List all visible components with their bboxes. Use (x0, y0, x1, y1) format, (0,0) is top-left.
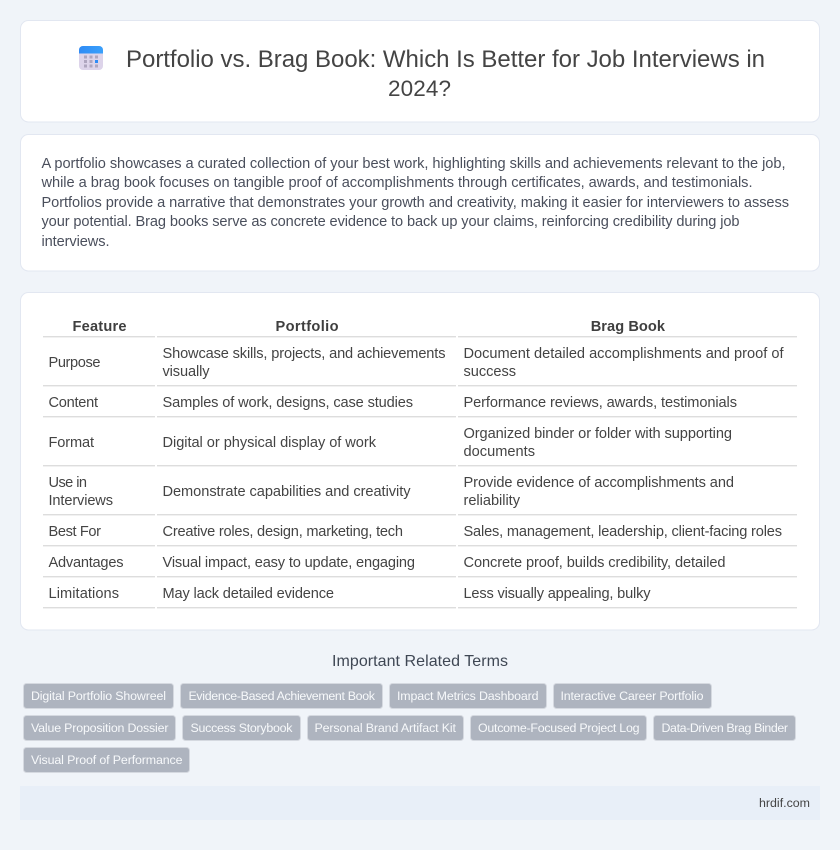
tag: Outcome-Focused Project Log (470, 716, 646, 740)
table row: Purpose: Showcase skills, projects, and achievements (162, 346, 446, 362)
heading: related terms: Important Related Terms (332, 653, 508, 670)
tag: Impact Metrics Dashboard: Impact Metrics Dashboard (397, 689, 539, 703)
table row: Best For (43, 524, 797, 546)
footer source label: hrdif.com (759, 796, 810, 810)
panel: summary (20, 134, 820, 271)
table row: Limitations: Limitations (48, 586, 119, 602)
tag: Outcome-Focused Project Log: Outcome-Focused Project Log (478, 721, 640, 735)
tag: Evidence-Based Achievement Book (180, 684, 382, 708)
table row: Content: Content (48, 395, 98, 411)
table row: Advantages: Advantages (48, 555, 124, 571)
table header row (43, 319, 797, 337)
title: Portfolio vs. Brag Book: Which Is Better for Job Interviews in (126, 46, 765, 73)
tag: Personal Brand Artifact Kit: Personal Brand Artifact Kit (314, 721, 457, 735)
table row: Format (43, 426, 797, 466)
summary text block (40, 156, 789, 250)
table row: Content (43, 395, 797, 417)
table row: Format: Format (48, 435, 94, 451)
table row: Advantages: Concrete proof, builds credibility, detailed (464, 555, 726, 571)
table row: Purpose: Document detailed accomplishments and proof of (464, 346, 784, 362)
table row: Format: Organized binder or folder with supporting (464, 426, 732, 442)
tag: Value Proposition Dossier (24, 716, 176, 740)
title: 2024? (388, 76, 451, 101)
icon: calendar (79, 46, 103, 70)
tag: Success Storybook (182, 716, 300, 740)
table row: Use in Interviews: Demonstrate capabilities and creativity (162, 484, 411, 500)
tag: Digital Portfolio Showreel (24, 684, 174, 708)
summary text block: A portfolio showcases a curated collection of your best work, highlighting skills and achievements relevant to the job, (42, 156, 786, 172)
summary text block: your potential. Brag books serve as concrete evidence to back up your claims, reinforcing credibility during job (42, 214, 740, 230)
tag: Digital Portfolio Showreel: Digital Portfolio Showreel (31, 689, 166, 703)
summary text block: while a brag book focuses on tangible proof of accomplishments through certificates, awards, and testimonials. (40, 175, 752, 191)
tag: Evidence-Based Achievement Book: Evidence-Based Achievement Book (188, 689, 376, 703)
table row: Purpose: visually (162, 364, 210, 380)
table row: Use in Interviews: Use in (48, 475, 87, 491)
table row: Use in Interviews: Interviews (48, 493, 113, 509)
panel: comparison table (20, 292, 820, 630)
table header row: Brag Book (591, 319, 666, 335)
table row: Best For: Sales, management, leadership, client-facing roles (464, 524, 782, 540)
tag: Data-Driven Brag Binder: Data-Driven Brag Binder (662, 721, 788, 735)
tag: Success Storybook: Success Storybook (190, 721, 293, 735)
table row: Best For: Best For (48, 524, 101, 540)
panel: title header (20, 20, 820, 122)
table row: Advantages (43, 555, 797, 577)
table row: Content: Samples of work, designs, case studies (162, 395, 413, 411)
table row: Format: Digital or physical display of work (162, 435, 377, 451)
table row: Content: Performance reviews, awards, testimonials (464, 395, 737, 411)
table row: Use in Interviews: reliability (464, 493, 521, 509)
table row: Limitations: May lack detailed evidence (162, 586, 334, 602)
tag: Impact Metrics Dashboard (390, 684, 546, 708)
tag: Visual Proof of Performance (24, 748, 190, 772)
table row: Best For: Creative roles, design, marketing, tech (162, 524, 403, 540)
tag: Visual Proof of Performance: Visual Proof of Performance (31, 753, 183, 767)
table row: Purpose: success (464, 364, 516, 380)
tag: Value Proposition Dossier: Value Proposition Dossier (31, 721, 168, 735)
table row: Purpose (43, 346, 797, 386)
table row: Use in Interviews: Provide evidence of accomplishments and (464, 475, 734, 491)
related terms tags (24, 684, 796, 772)
table row: Limitations (43, 586, 797, 608)
tag: Interactive Career Portfolio (554, 684, 712, 708)
table row: Use in Interviews (43, 475, 797, 515)
tag: Interactive Career Portfolio: Interactive Career Portfolio (560, 689, 704, 703)
summary text block: Portfolios provide a narrative that demonstrates your growth and creativity, making it easier for interviewers to assess (42, 195, 789, 211)
title (126, 46, 765, 101)
tag: Data-Driven Brag Binder (654, 716, 796, 740)
summary text block: interviews. (42, 234, 110, 250)
table row: Format: documents (464, 444, 535, 460)
table row: Purpose: Purpose (48, 355, 100, 371)
table header row: Feature (72, 319, 126, 335)
table header row: Portfolio (276, 319, 339, 335)
tag: Personal Brand Artifact Kit (308, 716, 464, 740)
footer bar (20, 786, 820, 820)
table row: Advantages: Visual impact, easy to update, engaging (162, 555, 415, 571)
table row: Limitations: Less visually appealing, bulky (464, 586, 651, 602)
